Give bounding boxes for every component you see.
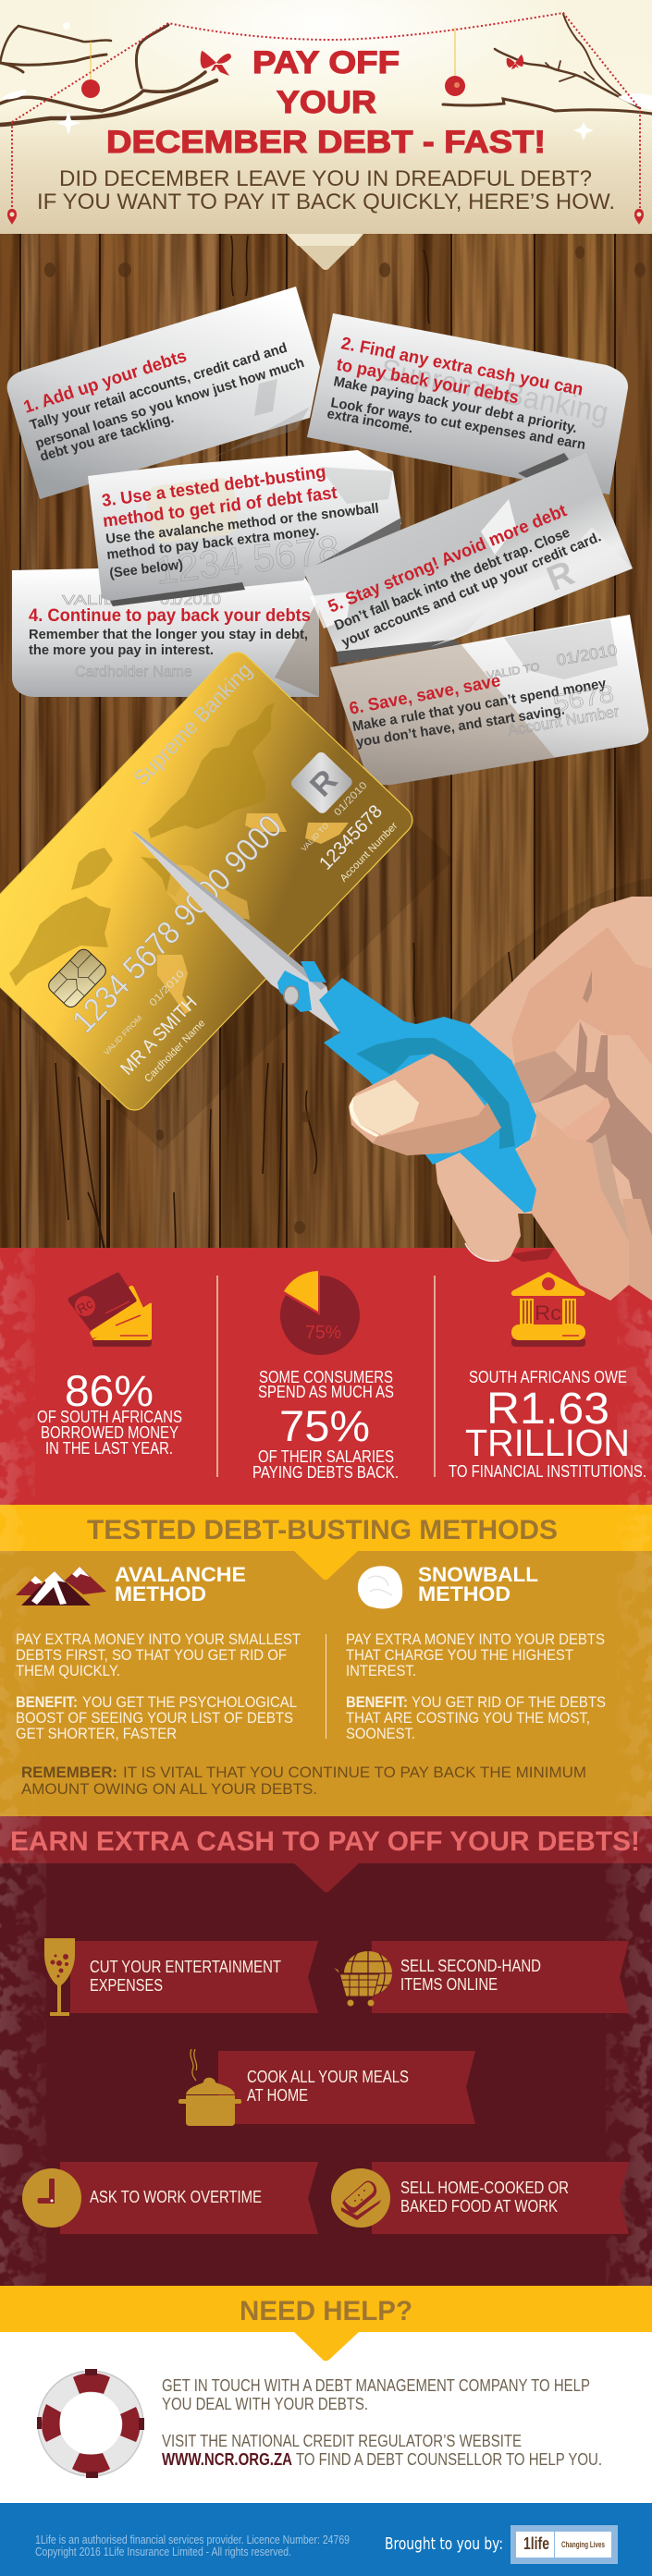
- text: step 6: 01/2010: [555, 641, 619, 669]
- decoration: snow on branches: [2, 22, 652, 140]
- text: step 5: Don’t fall back into the debt trap. Close: [332, 525, 572, 634]
- text: 86 percent stat: 86%: [65, 1366, 154, 1415]
- callout: sell baked food: BAKED FOOD AT WORK: [400, 2197, 558, 2216]
- text: card details: MR A SMITH: [117, 993, 202, 1080]
- text: snowball description: YOU GET RID OF THE DEBTS: [412, 1693, 606, 1711]
- text: 75 percent stat: [252, 1368, 399, 1482]
- text: step 4: 01/2010: [160, 591, 221, 608]
- callout: sell online: SELL SECOND-HAND: [400, 1957, 541, 1975]
- panel: step 5 note: R: [542, 554, 580, 599]
- text: avalanche description: [16, 1630, 301, 1742]
- illustration: scissors: [131, 831, 536, 1213]
- text: snowball description: INTEREST.: [346, 1662, 416, 1679]
- panel: step 4 note: [12, 568, 319, 697]
- text: 75 percent stat: PAYING DEBTS BACK.: [252, 1463, 399, 1482]
- icon: globe shopping cart: [333, 1951, 392, 2006]
- panel: wood background: [0, 234, 652, 1251]
- icon: chip: [45, 946, 109, 1010]
- title: YOUR: [277, 85, 376, 120]
- callout: sell online: ITEMS ONLINE: [400, 1975, 498, 1994]
- text: step 4: Remember that the longer you stay in debt,: [29, 627, 308, 642]
- text: step 3: method to pay back extra money.: [106, 523, 320, 563]
- text: avalanche heading: AVALANCHE: [115, 1563, 246, 1586]
- text: step 4: Cardholder Name: [75, 663, 192, 680]
- text: subtitle: [37, 166, 615, 214]
- text: 86 percent stat: OF SOUTH AFRICANS: [37, 1408, 182, 1426]
- text: card details: 12345678: [315, 801, 387, 874]
- text: step 1: 1. Add up your debts: [21, 347, 190, 418]
- panel: earn extra cash: [0, 1816, 652, 2286]
- decoration: red dotted garland: [12, 13, 640, 208]
- panel: header: [0, 0, 652, 270]
- text: card details: Account Number: [338, 820, 400, 885]
- text: legal: [35, 2533, 350, 2558]
- panel: step 3 note: [88, 450, 401, 606]
- icon: lifebuoy: [37, 2369, 144, 2478]
- text: remember note: IT IS VITAL THAT YOU CONTINUE TO PAY BACK THE MINIMUM: [123, 1764, 586, 1781]
- text: avalanche description: GET SHORTER, FASTER: [16, 1725, 177, 1742]
- icon: credit cards: Rc: [74, 1296, 95, 1316]
- title: PAY OFF: [252, 45, 400, 80]
- icon: snowball: [358, 1566, 402, 1609]
- text: avalanche description: DEBTS FIRST, SO THAT YOU GET RID OF: [16, 1646, 287, 1664]
- text: bank name: Supreme Banking: [129, 658, 256, 790]
- heading: earn extra cash: EARN EXTRA CASH TO PAY OFF YOUR DEBTS!: [10, 1826, 640, 1857]
- icon: credit cards: [68, 1273, 152, 1347]
- text: legal: 1Life is an authorised financial services provider. Licence Number: 24769: [35, 2533, 350, 2546]
- text: trillion stat: [449, 1368, 646, 1481]
- panel: step 1 note: [7, 287, 320, 499]
- text: step 4: [29, 591, 311, 680]
- icon: bank: Rc: [535, 1301, 561, 1325]
- illustration: thumb: [349, 1054, 501, 1155]
- icon: mountains: [16, 1567, 106, 1605]
- text: snowball heading: SNOWBALL: [418, 1563, 538, 1586]
- text: step 3: (See below): [108, 556, 184, 581]
- panel: gold credit card: [0, 647, 418, 1116]
- icon: pins: [7, 209, 644, 225]
- text: step 1: personal loans so you know just how much: [33, 355, 306, 452]
- text: card details: Cardholder Name: [142, 1018, 207, 1085]
- text: help advice: [162, 2376, 602, 2469]
- panel: step 2 note: Supreme Banking: [378, 352, 611, 430]
- text: card details: VALID FROM: [102, 1014, 144, 1057]
- icon: R badge: [289, 751, 354, 815]
- icon: R badge: R: [303, 763, 344, 803]
- text: card details: 01/2010: [332, 780, 370, 818]
- text: help advice: VISIT THE NATIONAL CREDIT REGULATOR’S WEBSITE: [162, 2432, 522, 2450]
- callout: sell online: [372, 1941, 629, 2013]
- text: avalanche heading: METHOD: [115, 1582, 206, 1605]
- text: step 3: 3. Use a tested debt-busting: [101, 462, 327, 511]
- text: step 1: Tally your retail accounts, credit card and: [28, 340, 289, 433]
- text: step 2: [326, 334, 586, 453]
- text: step 3: Use the avalanche method or the snowball: [105, 500, 380, 547]
- text: card details: 01/2010: [147, 969, 187, 1008]
- text: step 6: 5678: [551, 679, 616, 717]
- callout: cut entertainment: EXPENSES: [90, 1976, 163, 1995]
- text: legal: Copyright 2016 1Life Insurance Limited - All rights reserved.: [35, 2545, 291, 2558]
- text: step 6: Make a rule that you can’t spend money: [351, 676, 608, 735]
- text: card details: VALID TO: [300, 822, 330, 853]
- text: step 4: VALID: [62, 592, 117, 608]
- panel: step 2 note: [307, 313, 628, 494]
- text: step 4: the more you pay in interest.: [29, 642, 214, 658]
- icon: 1Life logo: Changing Lives: [561, 2540, 605, 2549]
- text: snowball description: THAT CHARGE YOU THE HIGHEST: [346, 1646, 573, 1664]
- text: step 6: [348, 641, 621, 751]
- text: step 6: you don’t have, and start saving.: [355, 702, 566, 751]
- icon: 1Life logo: 1life: [523, 2534, 549, 2553]
- text: step 2: Look for ways to cut expenses and earn: [329, 395, 586, 453]
- text: step 6: Account Number: [506, 702, 621, 739]
- callout: work overtime: ASK TO WORK OVERTIME: [90, 2188, 262, 2206]
- text: snowball description: [346, 1630, 606, 1742]
- text: help advice: WWW.NCR.ORG.ZA: [162, 2450, 292, 2469]
- icon: red bows: [201, 51, 523, 76]
- text: snowball description: SOONEST.: [346, 1725, 415, 1742]
- text: step 2: 2. Find any extra cash you can: [339, 334, 584, 400]
- text: 75 percent stat: SPEND AS MUCH AS: [258, 1383, 394, 1401]
- callout: sell baked food: SELL HOME-COOKED OR: [400, 2179, 569, 2197]
- panel: need help: [0, 2286, 652, 2503]
- icon: 1Life logo: [511, 2525, 618, 2564]
- text: avalanche description: THEM QUICKLY.: [16, 1662, 120, 1679]
- callout: cook at home: COOK ALL YOUR MEALS: [247, 2068, 409, 2086]
- callout: cook at home: [218, 2051, 475, 2124]
- icon: ornaments: [81, 28, 465, 98]
- title: [106, 45, 546, 160]
- text: subtitle: DID DECEMBER LEAVE YOU IN DREADFUL DEBT?: [59, 166, 592, 191]
- callout: cut entertainment: [70, 1941, 318, 2013]
- text: card number: 1234 5678 9000 9000: [66, 808, 289, 1040]
- text: step 3: method to get rid of debt fast: [102, 483, 338, 531]
- text: card details: [101, 778, 406, 1093]
- text: snowball description: BENEFIT:: [346, 1693, 408, 1711]
- callout: cut entertainment: CUT YOUR ENTERTAINMENT: [90, 1958, 281, 1976]
- text: step 3: [101, 462, 380, 581]
- text: step 6: 6. Save, save, save: [348, 671, 502, 719]
- text: snowball heading: [418, 1563, 538, 1605]
- text: step 2: Make paying back your debt a priority.: [332, 373, 579, 436]
- text: step 5: 5. Stay strong! Avoid more debt: [326, 501, 570, 617]
- text: snowball heading: METHOD: [418, 1582, 511, 1605]
- text: trillion stat: TRILLION: [465, 1422, 630, 1464]
- chart: 75 percent pie: 75%: [305, 1323, 341, 1343]
- icon: champagne glass: [44, 1938, 75, 2016]
- text: remember note: REMEMBER:: [21, 1764, 117, 1781]
- text: trillion stat: R1.63: [486, 1385, 609, 1434]
- text: 86 percent stat: IN THE LAST YEAR.: [45, 1439, 173, 1458]
- text: avalanche description: YOU GET THE PSYCHOLOGICAL: [82, 1693, 297, 1711]
- text: avalanche description: BENEFIT:: [16, 1693, 78, 1711]
- text: 86 percent stat: BORROWED MONEY: [41, 1423, 178, 1442]
- icon: sandwich: [331, 2168, 390, 2228]
- text: 75 percent stat: 75%: [279, 1401, 370, 1450]
- text: step 2: extra income.: [326, 406, 414, 436]
- text: help advice: YOU DEAL WITH YOUR DEBTS.: [162, 2395, 368, 2413]
- panel: step 5 note: [303, 453, 633, 664]
- text: snowball description: THAT ARE COSTING YOU THE MOST,: [346, 1709, 590, 1727]
- illustration: branches: [0, 14, 652, 125]
- text: remember note: AMOUNT OWING ON ALL YOUR DEBTS.: [21, 1780, 317, 1798]
- icon: clock: [22, 2168, 81, 2228]
- text: 86 percent stat: [37, 1366, 182, 1458]
- icon: cooking pot: [178, 2049, 241, 2126]
- panel: step 6 note: [330, 615, 648, 785]
- icon: bank: [511, 1272, 585, 1347]
- text: avalanche description: PAY EXTRA MONEY INTO YOUR SMALLEST: [16, 1630, 301, 1648]
- text: avalanche description: BOOST OF SEEING YOUR LIST OF DEBTS: [16, 1709, 293, 1727]
- panel: footer: [0, 2503, 652, 2576]
- callout: cook at home: AT HOME: [247, 2086, 308, 2105]
- icon: world map: [9, 702, 349, 1014]
- text: brought to you by: Brought to you by:: [385, 2534, 503, 2554]
- text: subtitle: IF YOU WANT TO PAY IT BACK QUICKLY, HERE’S HOW.: [37, 189, 615, 214]
- title: DECEMBER DEBT - FAST!: [106, 125, 546, 160]
- heading: need help: NEED HELP?: [240, 2296, 412, 2326]
- text: step 6: VALID TO: [486, 660, 541, 682]
- text: step 5: your accounts and cut up your credit card.: [339, 529, 604, 651]
- text: 75 percent stat: SOME CONSUMERS: [259, 1368, 393, 1386]
- panel: red statistics section: [0, 1248, 652, 1505]
- chart: 75 percent pie: [280, 1271, 360, 1355]
- text: step 2: to pay back your debts: [335, 355, 521, 408]
- heading: methods: TESTED DEBT-BUSTING METHODS: [87, 1515, 558, 1545]
- text: step 4: 4. Continue to pay back your debts: [29, 606, 311, 626]
- callout: work overtime: [60, 2162, 318, 2234]
- shadow: hand and card on wood: [0, 689, 652, 1248]
- text: step 1: debt you are tackling.: [38, 410, 176, 465]
- panel: tested debt-busting methods: [0, 1505, 652, 1816]
- panel: step 3 note: 1234 5678: [153, 527, 342, 592]
- text: snowball description: PAY EXTRA MONEY INTO YOUR DEBTS: [346, 1630, 605, 1648]
- text: 75 percent stat: OF THEIR SALARIES: [258, 1447, 394, 1466]
- text: remember note: [21, 1764, 586, 1798]
- illustration: hand: [435, 897, 652, 1300]
- callout: sell baked food: [372, 2162, 629, 2234]
- text: avalanche heading: [115, 1563, 246, 1605]
